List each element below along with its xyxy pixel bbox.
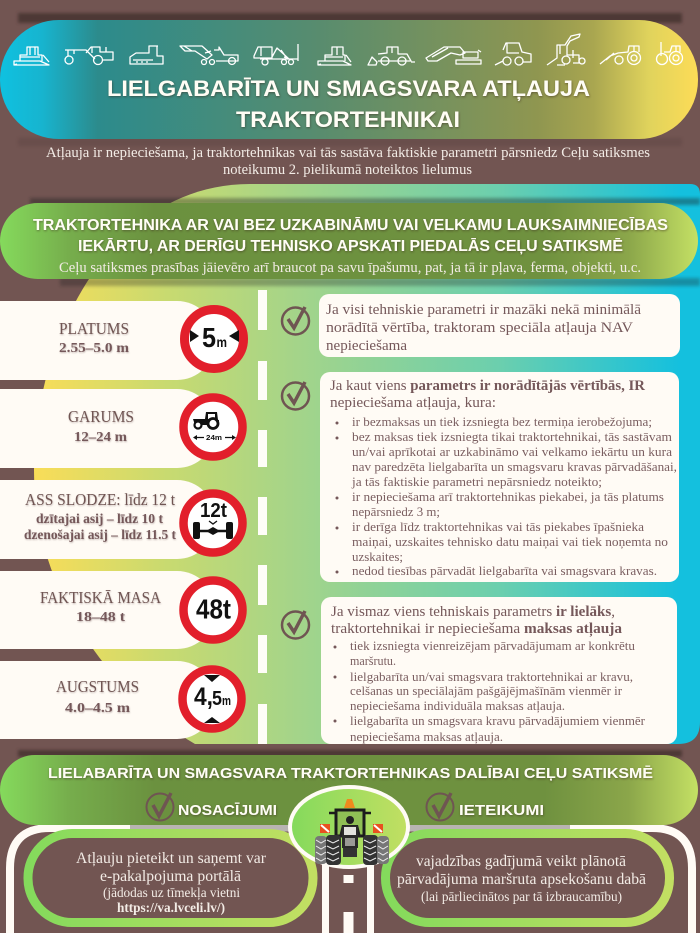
icon: 4.5 m height sign: m — [222, 693, 231, 708]
panel: height: 4.0–4.5 m — [65, 700, 131, 715]
icon: tractor in oval — [290, 787, 408, 867]
bullet list: free permit conditions: maiņai, uzskaites tehnisko datu maiņai vai tiek noņemta no — [352, 534, 668, 549]
bullet list: paid permit conditions: lielgabarīta un smagsvara kravu pārvadājumiem vienmēr — [350, 713, 646, 728]
panel: height: AUGSTUMS — [56, 677, 139, 696]
subtitle text — [46, 145, 650, 178]
panel: height — [0, 661, 242, 739]
panel: conditions — [28, 834, 313, 922]
panel: conditions: (jādodas uz tīmekļa vietni — [103, 885, 240, 900]
bullet list: paid permit conditions: lielgabarīta un/vai smagsvara traktortehnikai ar kravu, — [350, 669, 633, 684]
road markings — [10, 828, 692, 933]
panel: title banner — [0, 13, 698, 146]
icon: 4.5 m height sign: 5 — [212, 688, 222, 710]
bullet list: paid permit conditions — [334, 638, 646, 744]
panel: length: 12–24 m — [74, 429, 128, 444]
panel: width: 2.55–5.0 m — [59, 340, 130, 355]
icon: 5 m width sign: m — [216, 334, 227, 350]
panel: actual mass: FAKTISKĀ MASA — [40, 588, 162, 607]
bullet list: free permit conditions: nepārsniedz 3 m; — [352, 504, 440, 519]
panel: tractor rule banner — [0, 198, 700, 286]
panel: length — [0, 389, 242, 468]
icon: 48 t mass sign — [184, 580, 242, 640]
bullet list: paid permit conditions: tiek izsniegta vienreizējam pārvadājumam ar konkrētu — [350, 638, 635, 653]
bullet list: paid permit conditions: nepieciešama maksas atļauja. — [350, 729, 503, 744]
icon row: construction vehicles — [14, 34, 682, 65]
icon: 48 t mass sign: 48t — [196, 594, 231, 624]
panel: conditions: https://va.lvceli.lv/) — [117, 900, 225, 915]
icon: 24 m length sign — [184, 398, 242, 456]
panel: axle load: dzenošajai asij – līdz 11.5 t — [24, 527, 176, 542]
panel: recommendations: pārvadājuma maršruta apsekošanu dabā — [397, 871, 646, 888]
panel: recommendations — [386, 834, 670, 922]
bullet list: free permit conditions: ir derīga līdz traktortehnikas vai tās piekabes īpašnieka — [352, 519, 644, 534]
panel: width: PLATUMS — [59, 319, 129, 338]
icon: check mark 1 — [282, 307, 309, 334]
panel: actual mass: 18–48 t — [76, 609, 126, 624]
bullet list: free permit conditions: uzskaites; — [352, 549, 403, 564]
icon: check recommendations — [426, 793, 454, 820]
bullet list: paid permit conditions: celšanas un speciālajām pašgājējmašīnām vienmēr ir — [350, 683, 623, 698]
panel: axle load — [0, 480, 242, 559]
panel: length: GARUMS — [68, 407, 134, 426]
subtitle text: noteikumu 2. pielikumā noteiktos lielumus — [223, 162, 472, 178]
heading: recommendations: IETEIKUMI — [459, 802, 544, 819]
bullet list: free permit conditions: nav paredzēta lielgabarīta un smagsvaru kravas pārvadāšanai, — [352, 459, 677, 474]
subtitle text: Atļauja ir nepieciešama, ja traktortehnikas vai tās sastāva faktiskie parametri pārsniedz Ceļu satiksmes — [46, 145, 650, 161]
bullet list: free permit conditions: ir bezmaksas un tiek izsniegta bez termiņa ierobežojuma; — [352, 414, 652, 429]
callout: no permit needed: nepieciešama — [326, 338, 407, 354]
panel: conditions: Atļauju pieteikt un saņemt var — [76, 850, 267, 867]
panel: axle load: ASS SLODZE: līdz 12 t — [25, 490, 175, 509]
callout: no permit needed: norādītā vērtība, traktoram speciāla atļauja NAV — [326, 320, 633, 336]
banner heading: TRAKTORTEHNIKA AR VAI BEZ UZKABINĀMU VAI VELKAMU LAUKSAIMNIECĪBAS — [33, 215, 668, 234]
callout: no permit needed — [319, 294, 680, 357]
icon: 24 m length sign: 24m — [206, 433, 222, 442]
bullet list: free permit conditions: ir nepieciešama arī traktortehnikas piekabei, ja tās platums — [352, 489, 664, 504]
panel: actual mass — [0, 571, 242, 649]
callout: free permit — [320, 372, 679, 582]
bullet list: free permit conditions: bez maksas tiek izsniegta tikai traktortehnikai, tās sastāvam — [352, 429, 672, 444]
panel: recommendations: vajadzības gadījumā veikt plānotā — [416, 853, 626, 870]
title — [107, 76, 590, 132]
icon: 4.5 m height sign: 4, — [194, 683, 213, 711]
icon: check mark 2 — [282, 382, 309, 410]
icon: 12 t axle sign: 12t — [200, 500, 227, 522]
icon: check mark 3 — [282, 611, 309, 638]
banner heading — [33, 215, 668, 255]
panel: axle load: dzītajai asij – līdz 10 t — [36, 511, 163, 526]
bullet list: paid permit conditions: nepieciešama individuāla maksas atļauja. — [350, 698, 565, 713]
panel: conditions: e-pakalpojuma portālā — [100, 868, 241, 885]
bullet list: free permit conditions: un/vai aprīkotai ar uzkabināmo vai velkamo iekārtu un kura — [352, 444, 672, 459]
bullet list: paid permit conditions: maršrutu. — [350, 653, 396, 668]
bullet list: free permit conditions: nedod tiesības pārvadāt lielgabarīta vai smagsvara kravas. — [352, 563, 657, 578]
lane dashes — [258, 290, 267, 744]
callout: paid permit: Ja vismaz viens tehniskais parametrs ir lielāks, — [331, 604, 615, 620]
banner heading: IEKĀRTU, AR DERĪGU TEHNISKO APSKATI PIEDALĀS CEĻU SATIKSMĒ — [78, 236, 623, 255]
panel: bottom banner — [0, 750, 698, 825]
panel: recommendations: (lai pārliecinātos par tā izbraucamību) — [421, 889, 622, 904]
title: LIELGABARĪTA UN SMAGSVARA ATĻAUJA — [107, 76, 590, 101]
icon: 5 m width sign: 5 — [202, 322, 216, 353]
icon: 4.5 m height sign — [182, 670, 242, 728]
bullet list: free permit conditions — [336, 414, 677, 578]
panel: width — [0, 301, 244, 380]
callout: paid permit — [321, 597, 677, 744]
bottom heading: LIELABARĪTA UN SMAGSVARA TRAKTORTEHNIKAS DALĪBAI CEĻU SATIKSMĒ — [48, 765, 653, 782]
callout: paid permit: traktortehnikai ir nepieciešama maksas atļauja — [331, 621, 623, 637]
callout: free permit: Ja kaut viens parametrs ir norādītājās vērtībās, IR — [330, 378, 645, 394]
title: TRAKTORTEHNIKAI — [236, 107, 460, 132]
bullet list: free permit conditions: ja tās faktiskie parametri nepārsniedz noteikto; — [351, 474, 602, 489]
heading: conditions: NOSACĪJUMI — [178, 802, 277, 819]
icon: 5 m width sign — [184, 310, 244, 368]
callout: free permit: nepieciešama atļauja, kura: — [330, 395, 496, 411]
panel: gradient road background — [34, 184, 700, 744]
callout: no permit needed: Ja visi tehniskie parametri ir mazāki nekā minimālā — [326, 302, 641, 318]
icon: 12 t axle sign — [184, 494, 242, 552]
icon: check conditions — [146, 793, 174, 820]
banner note: Ceļu satiksmes prasības jāievēro arī braucot pa savu īpašumu, pat, ja tā ir pļava, ferma, objekti, u.c. — [59, 260, 641, 276]
